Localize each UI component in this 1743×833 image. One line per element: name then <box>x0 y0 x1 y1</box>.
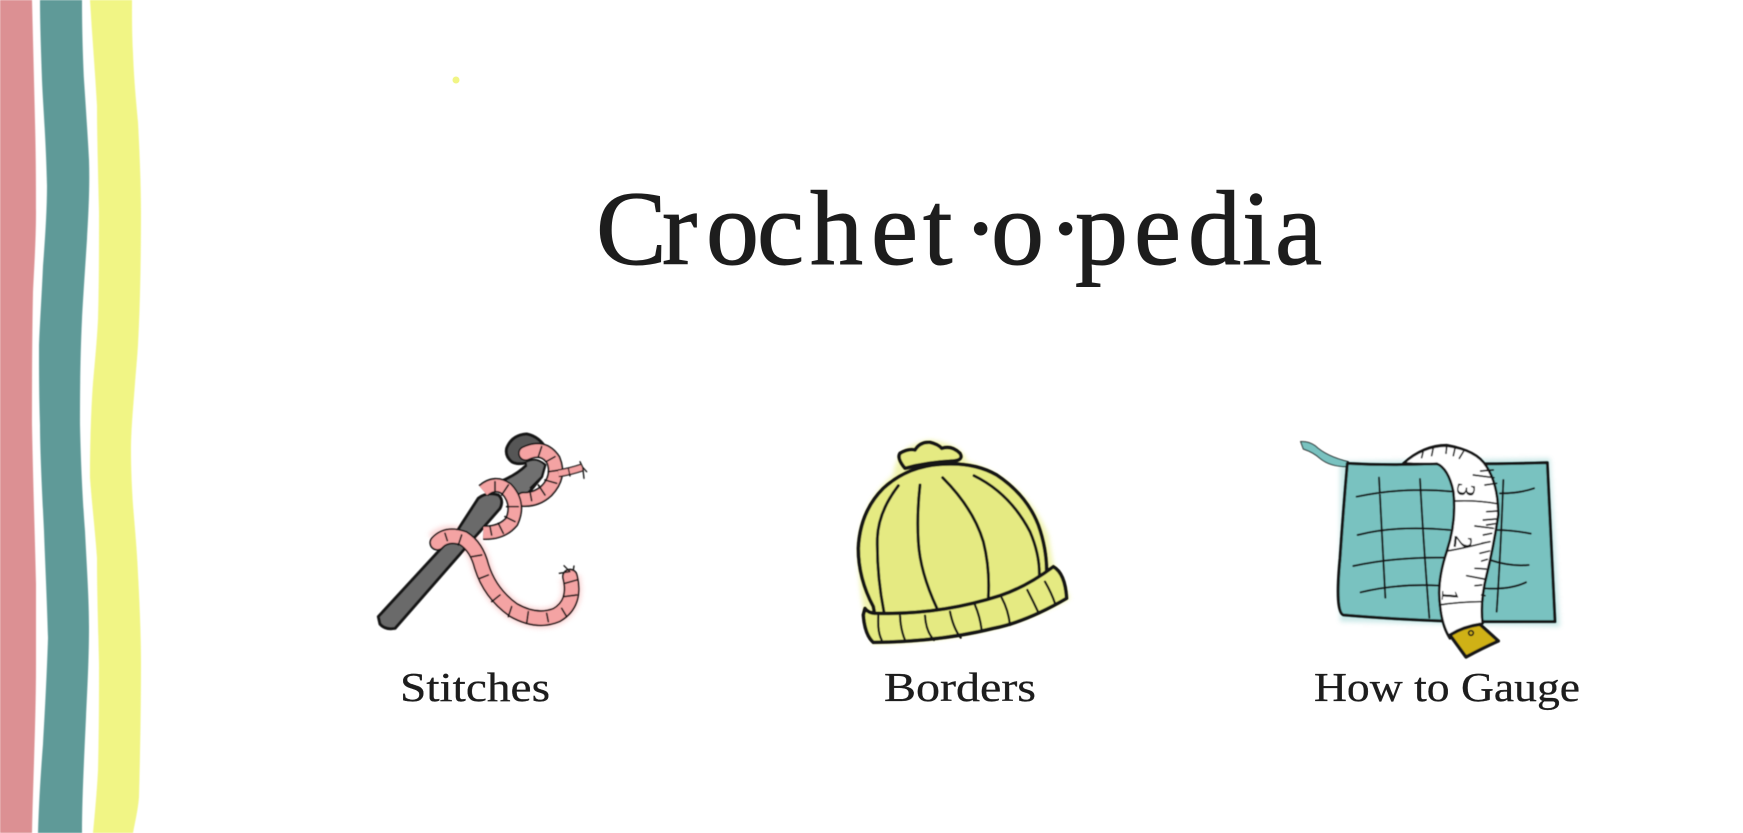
lower yarn strand <box>437 533 577 623</box>
swatch yarn tail <box>1301 442 1348 467</box>
label: Stitches: Stitches <box>400 664 550 710</box>
hat glow <box>859 440 1070 643</box>
hat ribs <box>877 476 1039 612</box>
label: Borders: Borders <box>884 664 1036 710</box>
decorative stripes <box>0 0 141 833</box>
title: Crochet·o·pedia <box>596 170 1322 287</box>
pompom <box>899 442 961 468</box>
tape back <box>1403 445 1490 472</box>
icon: crochet hook with pink yarn <box>378 434 587 629</box>
hook tip <box>506 434 547 464</box>
tip hole <box>1469 631 1473 635</box>
yarn tail upper <box>558 462 587 478</box>
icon: yellow knit hat <box>858 440 1070 643</box>
hook upper shaft <box>500 462 545 499</box>
icon: gauge swatch with tape measure <box>1301 442 1560 657</box>
brim ribs <box>878 582 1055 640</box>
icon: gauge swatch with tape measure: 2 <box>1448 534 1478 550</box>
tape numerals: 3 <box>1451 481 1481 498</box>
middle yarn loop <box>483 482 518 535</box>
pink stripe <box>0 0 36 833</box>
upper yarn loop <box>523 447 561 501</box>
icon: gauge swatch with tape measure: 1 <box>1436 589 1463 602</box>
tape tick marks <box>1422 447 1497 605</box>
swatch grid <box>1353 478 1534 618</box>
tape measure <box>1403 446 1498 638</box>
tape metal tip <box>1450 624 1498 657</box>
hat dome <box>858 464 1047 625</box>
yellow stripe <box>90 0 141 833</box>
label: How to Gauge: How to Gauge <box>1314 664 1580 710</box>
yarn glow <box>435 536 572 618</box>
swatch glow <box>1340 458 1560 627</box>
yellow speck <box>452 76 460 84</box>
hat brim <box>863 567 1067 642</box>
teal stripe <box>38 0 89 833</box>
hook lower shaft <box>378 494 502 629</box>
swatch <box>1338 463 1555 622</box>
